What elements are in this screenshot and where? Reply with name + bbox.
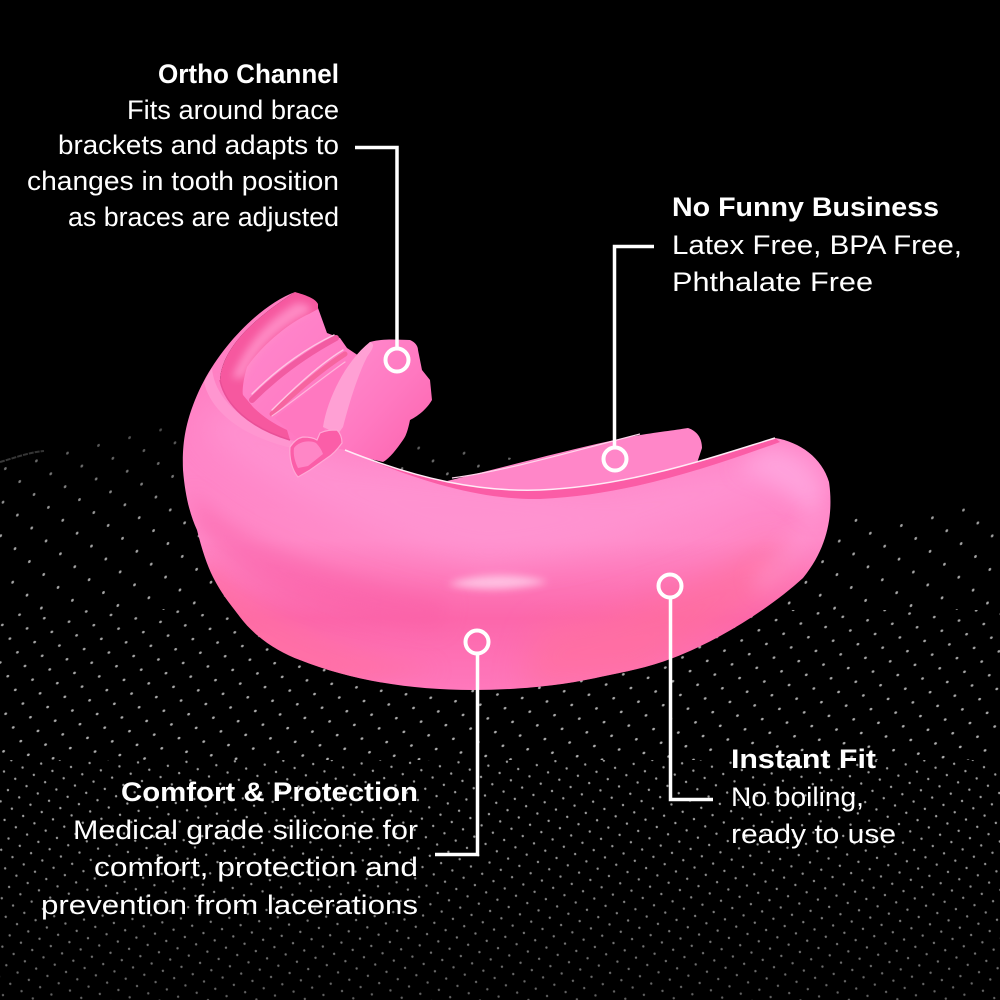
leader line <box>614 246 654 447</box>
back right tray section <box>447 428 702 496</box>
marker <box>604 448 626 470</box>
channel opening inner <box>294 441 323 468</box>
callout: instant fit <box>658 574 896 849</box>
tray ridges <box>252 335 345 440</box>
description: Phthalate Free <box>672 267 873 297</box>
callout: comfort and protection <box>41 630 488 920</box>
channel end opening <box>290 430 342 477</box>
description: brackets and adapts to <box>58 130 339 160</box>
description: ready to use <box>731 819 896 849</box>
heading: Comfort & Protection <box>121 777 418 807</box>
marker <box>386 348 408 372</box>
description <box>672 230 962 297</box>
ortho channel bump <box>323 340 432 462</box>
leader line <box>355 148 397 349</box>
rear flange <box>220 292 318 440</box>
rear flange highlight <box>232 303 310 378</box>
leader line <box>670 598 713 800</box>
description: comfort, protection and <box>94 852 418 882</box>
back tray highlight edge <box>452 434 640 478</box>
description <box>41 815 418 920</box>
leader line <box>435 654 478 854</box>
callout: no funny business <box>604 192 962 470</box>
description <box>27 95 339 232</box>
rim light band <box>204 368 292 448</box>
description: Medical grade silicone for <box>73 815 418 845</box>
heading: Instant Fit <box>731 744 876 774</box>
heading: No Funny Business <box>672 192 939 222</box>
dotted wave background <box>0 414 1000 1000</box>
description: Fits around brace <box>127 95 339 125</box>
description: Latex Free, BPA Free, <box>672 230 962 260</box>
inner rear wall <box>232 295 365 445</box>
description: changes in tooth position <box>27 166 339 196</box>
mouthguard product illustration <box>183 292 830 690</box>
description: No boiling, <box>731 782 864 812</box>
description <box>731 782 896 849</box>
main body of the guard <box>183 292 830 690</box>
heading: Ortho Channel <box>158 59 339 89</box>
bump ridge <box>323 342 373 434</box>
description: prevention from lacerations <box>41 890 418 920</box>
marker <box>466 630 488 654</box>
body shading and highlights <box>190 400 830 690</box>
description: as braces are adjusted <box>68 202 339 232</box>
marker <box>658 574 682 598</box>
callout: ortho channel <box>27 59 408 372</box>
rim highlight lines <box>220 380 775 490</box>
